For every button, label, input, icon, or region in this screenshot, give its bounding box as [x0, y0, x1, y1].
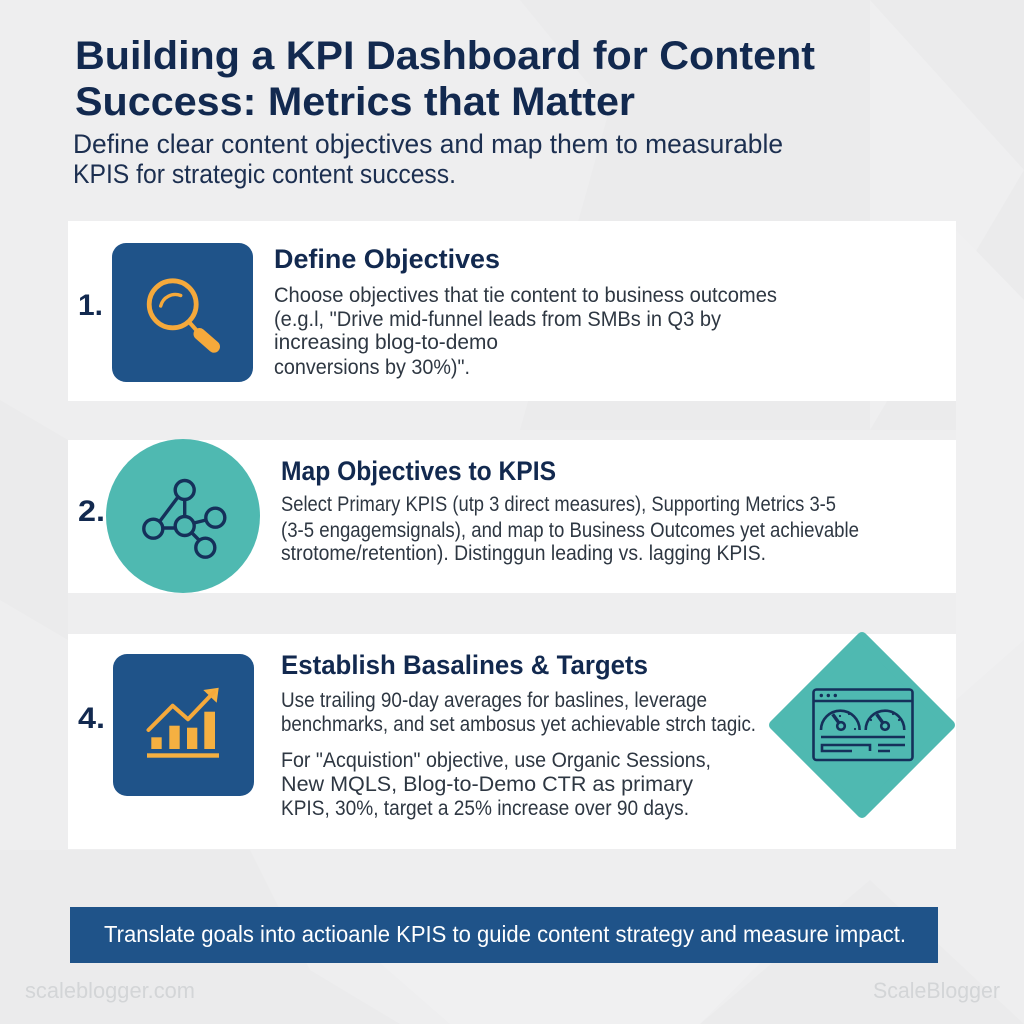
panel: map objectives to KPIs	[68, 439, 956, 593]
body text: (e.g.l, "Drive mid-funnel leads from SMBs in Q3 by	[274, 308, 721, 331]
body text: increasing blog-to-demo	[274, 331, 498, 354]
body text	[274, 284, 777, 379]
heading: Map Objectives to KPIS	[281, 456, 556, 486]
body text: Choose objectives that tie content to business outcomes	[274, 284, 777, 307]
body text: baselines: benchmarks, and set ambosus yet achievable strch tagic.	[281, 713, 756, 736]
icon: network	[106, 439, 260, 593]
step number 4: 4.	[78, 702, 105, 735]
subtitle: Define clear content objectives and map them to measurable	[73, 129, 783, 159]
body text: example: KPIS, 30%, target a 25% increase over 90 days.	[281, 797, 689, 820]
title: Building a KPI Dashboard for Content	[75, 34, 815, 78]
body text: example: New MQLS, Blog-to-Demo CTR as primary	[281, 773, 694, 796]
body text: baselines: Use trailing 90-day averages for baslines, leverage	[281, 689, 707, 712]
subtitle	[73, 129, 783, 189]
callout banner: Translate goals into actioanle KPIS to guide content strategy and measure impact.	[104, 921, 906, 947]
body text	[281, 493, 859, 565]
footer: brand: ScaleBlogger	[873, 978, 1000, 1003]
body text: example	[281, 749, 711, 820]
heading: Establish Basalines & Targets	[281, 650, 648, 680]
body text: example: For "Acquistion" objective, use Organic Sessions,	[281, 749, 711, 772]
footer: website: scaleblogger.com	[25, 978, 195, 1003]
title: Success: Metrics that Matter	[75, 80, 635, 124]
subtitle: KPIS for strategic content success.	[73, 159, 456, 189]
heading: Define Objectives	[274, 244, 500, 274]
panel: establish baselines and targets	[68, 634, 956, 849]
body text: (3-5 engagemsignals), and map to Business Outcomes yet achievable	[281, 519, 859, 542]
body text: Select Primary KPIS (utp 3 direct measures), Supporting Metrics 3-5	[281, 493, 836, 516]
body text: conversions by 30%)".	[274, 356, 470, 379]
icon: dashboard diamond	[774, 637, 950, 813]
callout banner	[70, 907, 938, 963]
step number 2: 2.	[78, 495, 105, 528]
body text: baselines	[281, 689, 756, 736]
step number 1: 1.	[78, 289, 103, 322]
title	[75, 34, 815, 124]
icon: magnifying glass	[112, 243, 253, 382]
icon: growth chart	[113, 654, 254, 796]
panel: define objectives	[68, 221, 956, 401]
body text: strotome/retention). Distinggun leading vs. lagging KPIS.	[281, 542, 766, 565]
